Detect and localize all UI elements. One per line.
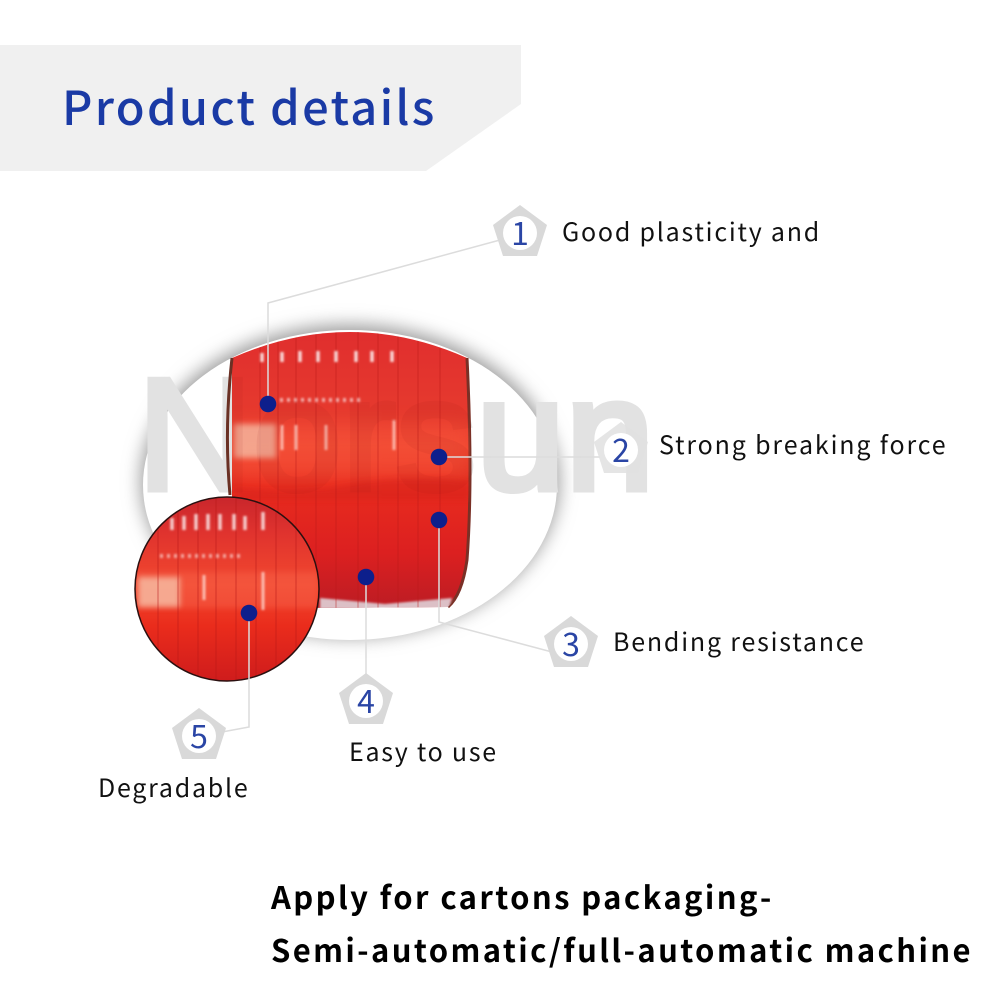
application note: Apply for cartons packaging-: [270, 873, 774, 918]
callout 1: 1: [511, 209, 529, 255]
product illustration: [135, 325, 655, 681]
magnified detail circle: [135, 497, 319, 681]
white ellipse with shadow: [141, 325, 559, 640]
callout 3: 3: [562, 620, 580, 666]
watermark behind roll: Norsun: [138, 347, 655, 523]
application note: Semi-automatic/full-automatic machine: [271, 926, 973, 971]
marker dots: [241, 396, 447, 621]
callout 2: [594, 422, 947, 473]
leader lines: [222, 240, 600, 732]
callout 3: [544, 616, 865, 667]
callout 2: 2: [612, 426, 630, 472]
callout 4: Easy to use: [349, 733, 498, 769]
application note: [270, 873, 973, 971]
red strap roll: [227, 330, 470, 612]
callout 5: [98, 708, 249, 805]
callout 4: 4: [357, 677, 375, 723]
callout 4: [339, 673, 498, 769]
callout 5: Degradable: [98, 769, 249, 805]
watermark over roll: Norsun: [138, 347, 655, 523]
title: Product details: [62, 70, 437, 139]
header banner: [0, 45, 521, 171]
callout 3: Bending resistance: [613, 623, 865, 659]
callout 5: 5: [190, 712, 208, 758]
callout 2: Strong breaking force: [659, 426, 947, 462]
callout 1: [493, 205, 821, 256]
callout 1: Good plasticity and: [562, 213, 821, 249]
